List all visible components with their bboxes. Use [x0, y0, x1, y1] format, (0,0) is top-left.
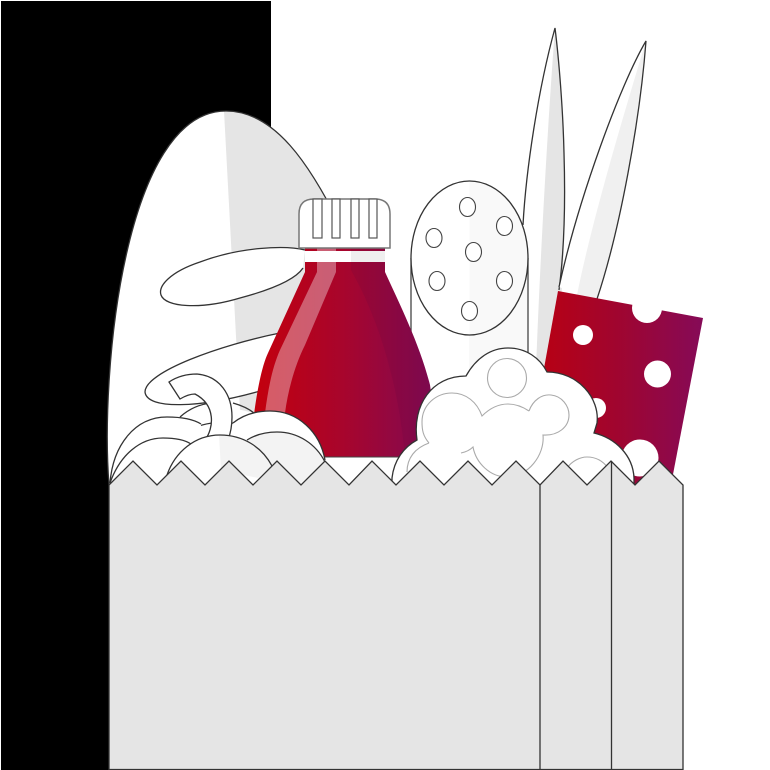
bottle body — [250, 248, 440, 457]
bag side fold left — [539, 485, 541, 770]
green stalk right — [559, 41, 646, 300]
bottle cap — [299, 199, 390, 248]
pumpkin segment centre — [167, 435, 272, 484]
pumpkin — [110, 374, 325, 484]
bag body with zigzag top — [109, 461, 683, 770]
pumpkin segment near right — [247, 432, 325, 484]
bag side fold right — [610, 461, 612, 770]
bottle base line — [325, 456, 420, 458]
cheese — [522, 291, 703, 490]
bottle label band — [305, 251, 385, 262]
salami body — [411, 258, 528, 468]
bread slice cut lower — [145, 333, 285, 405]
salami cut face — [411, 181, 470, 335]
cauliflower floret lines — [407, 358, 608, 477]
cauliflower outline — [392, 348, 634, 490]
paper bag — [109, 461, 683, 770]
pumpkin stem — [169, 374, 232, 440]
black background panel — [1, 1, 271, 770]
salami fat spots — [426, 198, 512, 320]
salami — [411, 181, 528, 468]
bottle shade — [351, 248, 440, 457]
bread slice cut upper — [161, 248, 305, 306]
green stalk left — [515, 28, 565, 370]
cheese holes — [573, 293, 671, 476]
cauliflower — [392, 348, 634, 490]
pumpkin segment near left — [110, 438, 191, 484]
bottle — [250, 248, 440, 457]
bottle highlight — [265, 248, 336, 413]
baguette — [107, 111, 345, 485]
pumpkin segment far left — [110, 417, 201, 484]
pumpkin segment far right — [233, 411, 325, 484]
